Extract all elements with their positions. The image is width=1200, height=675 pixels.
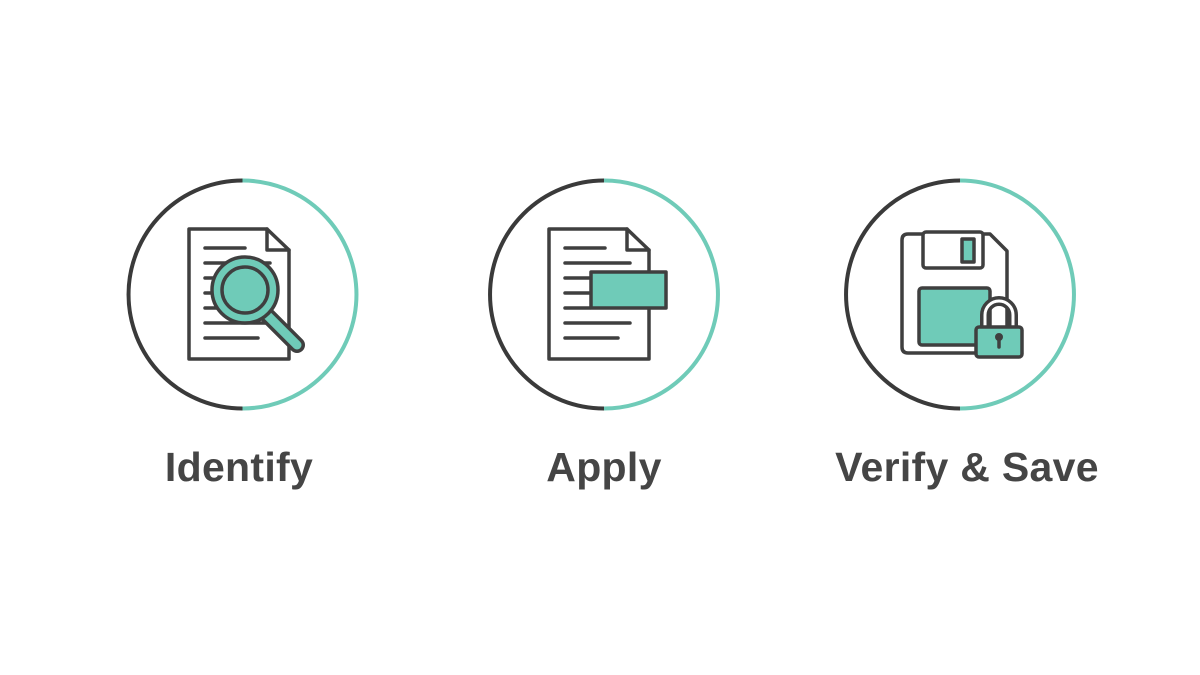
label: Identify: Identify (165, 444, 313, 490)
step 1 circle (129, 180, 356, 408)
label: Apply: Apply (546, 444, 662, 490)
icon: document with highlight block (549, 229, 666, 359)
icon: document with magnifier (189, 229, 297, 359)
icon: floppy disk with lock (902, 232, 1022, 357)
step 3 circle (846, 180, 1074, 408)
label: Verify & Save: Verify & Save (835, 444, 1099, 490)
step 2 circle (490, 180, 718, 408)
